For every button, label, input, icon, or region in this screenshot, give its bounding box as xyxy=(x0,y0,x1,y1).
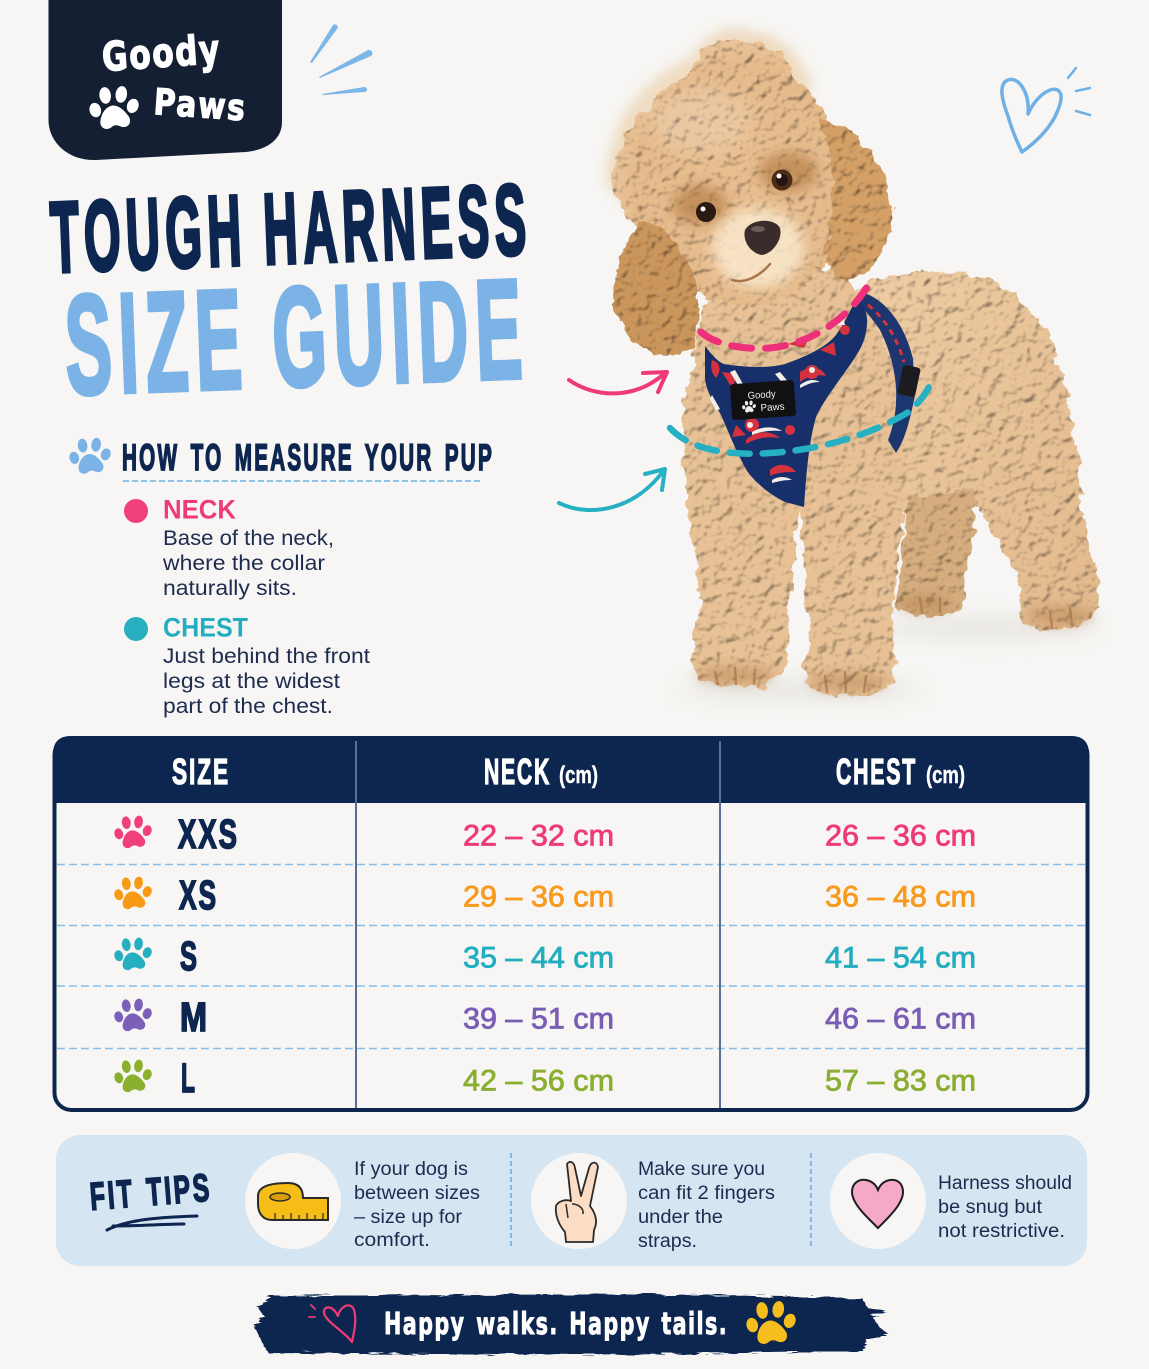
table header: CHEST xyxy=(836,751,917,792)
tip 2: two fingers: can fit 2 fingers xyxy=(638,1183,775,1204)
table header: NECK xyxy=(484,751,551,792)
row L: L xyxy=(181,1055,195,1101)
logo badge xyxy=(48,0,282,160)
row L: 42 – 56 cm xyxy=(463,1064,614,1098)
logo badge: Paws xyxy=(152,82,248,129)
bottom banner: Happy walks. Happy tails. xyxy=(384,1307,728,1342)
harness label xyxy=(730,380,796,420)
fit tips panel xyxy=(56,1135,1087,1266)
banner paw xyxy=(745,1300,798,1344)
neck dashed line xyxy=(701,277,873,348)
size table xyxy=(53,736,1089,1110)
tip 3: heart xyxy=(830,1153,1072,1249)
row S: S xyxy=(180,933,197,979)
body and near hind leg xyxy=(840,271,1099,630)
tip 2: two fingers: under the xyxy=(638,1207,723,1228)
ears xyxy=(613,118,893,356)
paw toes xyxy=(715,598,1072,692)
row XXS: XXS xyxy=(178,811,239,857)
wispy hair halo xyxy=(606,28,812,210)
tip 1: tape measure: – size up for xyxy=(354,1207,463,1228)
row S xyxy=(113,933,976,979)
row XXS: 26 – 36 cm xyxy=(825,820,976,852)
chest measurement: CHEST xyxy=(163,612,248,642)
chest measurement: Just behind the front xyxy=(163,645,370,668)
row XS: XS xyxy=(179,872,218,918)
head xyxy=(611,39,850,308)
teal arrow xyxy=(559,469,665,510)
title xyxy=(49,164,533,424)
pink arrow xyxy=(569,372,667,393)
how to measure heading xyxy=(68,437,494,481)
tip 2: two fingers xyxy=(531,1153,775,1252)
row XS: 36 – 48 cm xyxy=(825,880,976,914)
harness xyxy=(705,292,921,507)
eyes and nose xyxy=(696,170,792,281)
blue heart doodle xyxy=(1002,68,1090,152)
neck measurement: NECK xyxy=(163,494,236,524)
row XXS xyxy=(113,811,976,857)
row M: 46 – 61 cm xyxy=(825,1002,976,1036)
chest measurement: legs at the widest xyxy=(163,670,340,693)
row XXS: 22 – 32 cm xyxy=(463,820,614,852)
tip 3: heart: be snug but xyxy=(938,1197,1043,1218)
neck measurement: Base of the neck, xyxy=(163,527,334,550)
row S: 41 – 54 cm xyxy=(825,942,976,974)
text: TOUGH HARNESS xyxy=(49,164,533,294)
paw shading xyxy=(695,595,1094,692)
chest measurement: part of the chest. xyxy=(163,695,333,718)
table header: SIZE xyxy=(172,751,230,792)
tip 2: two fingers: Make sure you xyxy=(638,1159,765,1180)
logo badge: Goody xyxy=(100,27,222,81)
row M: 39 – 51 cm xyxy=(463,1002,614,1036)
tip 1: tape measure: If your dog is xyxy=(354,1159,468,1180)
tip 1: tape measure: between sizes xyxy=(354,1183,480,1204)
chest dashed line xyxy=(670,377,932,454)
neck measurement: naturally sits. xyxy=(163,577,297,600)
ground shadow xyxy=(675,616,1100,702)
row L xyxy=(113,1055,976,1101)
text: SIZE GUIDE xyxy=(62,249,532,424)
harness label: Paws xyxy=(760,402,785,414)
decorative rays near logo xyxy=(310,24,372,95)
table header xyxy=(172,751,965,792)
chest and front legs xyxy=(683,270,907,697)
far hind leg xyxy=(895,466,980,616)
row M: M xyxy=(180,994,207,1040)
tip 1: tape measure: comfort. xyxy=(354,1230,430,1251)
face shading xyxy=(650,88,818,288)
neck measurement xyxy=(124,494,334,600)
tip 3: heart: not restrictive. xyxy=(938,1221,1065,1242)
table header: (cm) xyxy=(559,762,598,789)
dog photo illustration xyxy=(606,28,1100,702)
neck measurement: where the collar xyxy=(162,552,325,575)
tip 3: heart: Harness should xyxy=(938,1173,1072,1194)
row S: 35 – 44 cm xyxy=(463,942,614,974)
banner heart xyxy=(309,1305,355,1342)
chest measurement xyxy=(124,612,370,718)
row XS: 29 – 36 cm xyxy=(463,880,614,914)
fit tips heading xyxy=(88,1167,213,1230)
fit tips heading: FIT TIPS xyxy=(88,1167,213,1219)
bottom banner xyxy=(254,1294,889,1355)
table header: (cm) xyxy=(926,762,965,789)
row XS xyxy=(113,872,976,918)
how to measure heading: HOW TO MEASURE YOUR PUP xyxy=(122,437,494,478)
row M xyxy=(113,994,976,1040)
row L: 57 – 83 cm xyxy=(825,1064,976,1098)
tip 2: two fingers: straps. xyxy=(638,1231,697,1252)
tip 1: tape measure xyxy=(245,1153,480,1251)
harness label: Goody xyxy=(747,389,776,402)
